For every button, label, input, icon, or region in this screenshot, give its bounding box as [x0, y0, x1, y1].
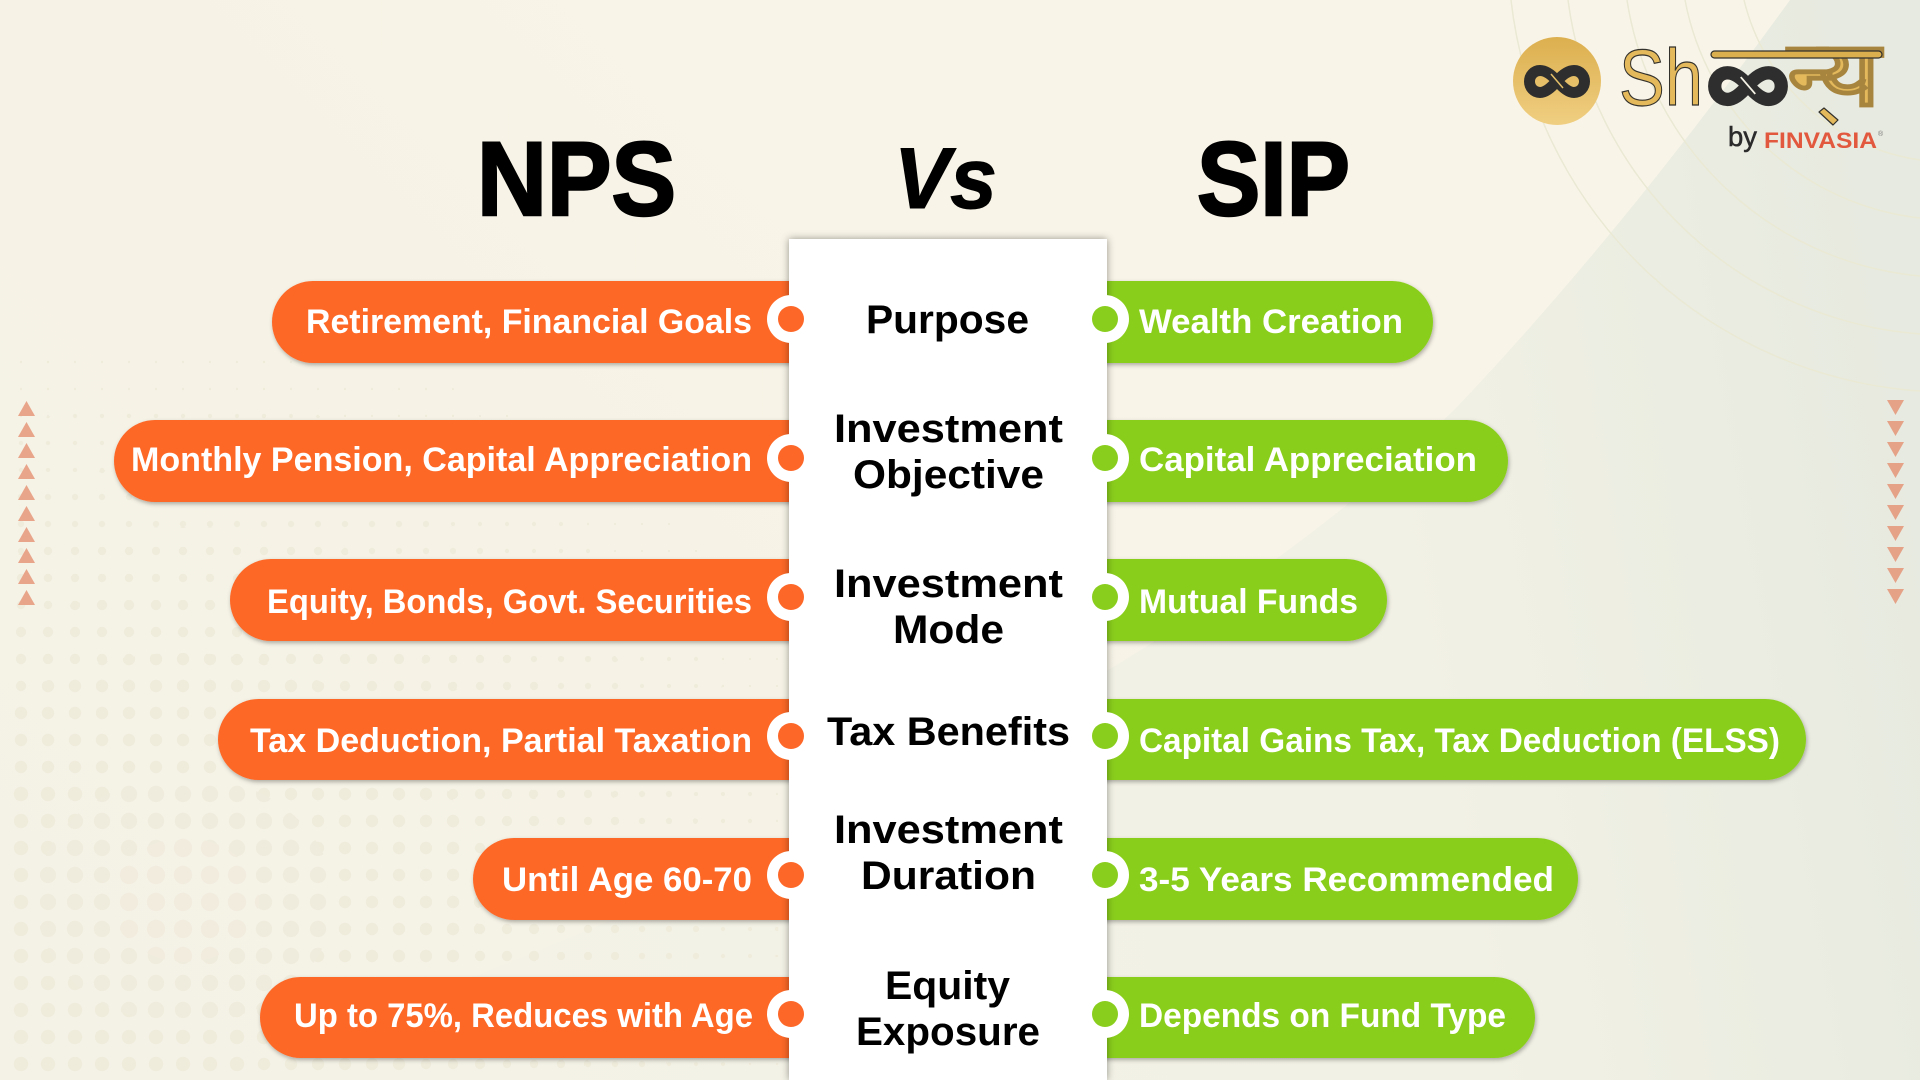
pill: NPS purpose [272, 281, 832, 363]
pill: NPS mode [230, 559, 832, 641]
logo [1513, 25, 1884, 153]
label: Investment Mode: Investment [834, 562, 1063, 606]
pill: SIP tax [1067, 699, 1806, 780]
label: Investment Objective: Investment [834, 407, 1063, 451]
SIP values: 3-5 Years Recommended [1139, 861, 1554, 899]
NPS connector dots [767, 295, 815, 1038]
title: NPS: NPS [477, 121, 676, 238]
category labels [827, 298, 1070, 1054]
label: Investment Duration [834, 808, 1063, 898]
by Finvasia [1728, 121, 1884, 153]
pill: NPS tax [218, 699, 832, 780]
SIP values [1139, 303, 1780, 1035]
NPS values: Up to 75%, Reduces with Age [294, 997, 753, 1035]
wordmark [1619, 25, 1883, 125]
SIP values: Wealth Creation [1139, 303, 1403, 341]
triangles: left column pointing up [18, 401, 35, 605]
label: Equity Exposure [856, 964, 1040, 1054]
title: SIP: SIP [1197, 121, 1350, 238]
label: Tax Benefits: Tax Benefits [827, 710, 1070, 754]
SIP connector dots [1081, 295, 1129, 1038]
title: Vs: Vs [894, 131, 997, 227]
pill: SIP purpose [1067, 281, 1433, 363]
wordmark: न्य [1786, 25, 1883, 125]
label: Investment Objective [834, 407, 1063, 497]
pill: NPS objective [114, 420, 832, 502]
center white panel [789, 239, 1107, 1080]
by Finvasia: ® [1878, 130, 1884, 138]
label: Equity Exposure: Equity [885, 964, 1010, 1008]
wordmark: Sh [1619, 33, 1703, 122]
NPS values [131, 303, 753, 1035]
NPS values: Until Age 60-70 [502, 861, 752, 899]
label: Investment Mode: Mode [893, 608, 1004, 652]
SIP pills [1067, 281, 1806, 1058]
triangles: right column pointing down [1887, 400, 1904, 604]
SIP values: Mutual Funds [1139, 583, 1358, 621]
NPS values: Tax Deduction, Partial Taxation [250, 722, 752, 760]
label: Purpose: Purpose [866, 298, 1029, 342]
pill: SIP equity [1067, 977, 1535, 1058]
by Finvasia: FINVASIA [1764, 128, 1877, 153]
label: Investment Objective: Objective [853, 453, 1044, 497]
pill: SIP mode [1067, 559, 1387, 641]
SIP values: Capital Gains Tax, Tax Deduction (ELSS) [1139, 722, 1780, 760]
SIP values: Depends on Fund Type [1139, 997, 1506, 1035]
SIP values: Capital Appreciation [1139, 441, 1477, 479]
label: Investment Mode [834, 562, 1063, 652]
pill: NPS duration [473, 838, 832, 920]
pill: NPS equity [260, 977, 832, 1058]
label: Investment Duration: Duration [861, 854, 1036, 898]
by Finvasia: by [1728, 121, 1757, 152]
label: Investment Duration: Investment [834, 808, 1063, 852]
pill: SIP objective [1067, 420, 1508, 502]
icon: gold infinity badge [1513, 37, 1601, 125]
NPS values: Equity, Bonds, Govt. Securities [267, 583, 752, 621]
NPS values: Monthly Pension, Capital Appreciation [131, 441, 752, 479]
NPS pills [114, 281, 832, 1058]
dot pattern [7, 341, 854, 1080]
pill: SIP duration [1067, 838, 1578, 920]
label: Equity Exposure: Exposure [856, 1010, 1040, 1054]
NPS values: Retirement, Financial Goals [306, 303, 752, 341]
